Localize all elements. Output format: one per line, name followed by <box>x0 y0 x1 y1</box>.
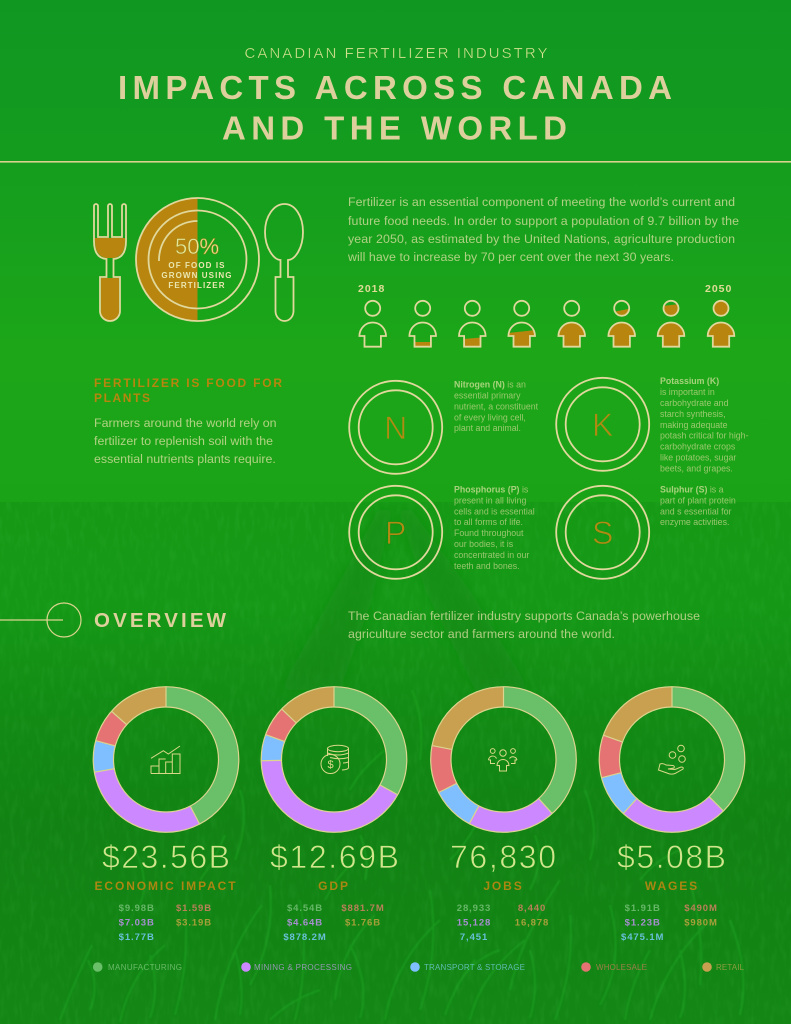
nutrient: nitrogen: nutrient, a constituent <box>454 401 539 411</box>
icon: people <box>488 749 517 771</box>
donut: gdp <box>261 686 407 832</box>
icon: plate with 50%: OF FOOD IS <box>168 261 226 270</box>
nutrient: potassium: starch synthesis, <box>660 409 726 419</box>
nutrient: sulphur: Sulphur (S) <box>660 484 707 494</box>
nutrient: sulphur: S <box>592 515 613 551</box>
person 1 <box>359 301 386 347</box>
nutrient: nitrogen: is an <box>505 380 526 390</box>
nutrient: sulphur: and s essential for <box>660 506 731 516</box>
left callout: fertilizer is food: essential nutrients plants require. <box>94 452 276 466</box>
intro text: year 2050, as estimated by the United Nations, agriculture production <box>348 232 735 246</box>
intro text <box>347 195 739 264</box>
overview text: The Canadian fertilizer industry supports Canada’s powerhouse <box>348 609 700 623</box>
nutrient: potassium: potash critical for high- <box>660 431 749 441</box>
person 2 <box>409 301 436 347</box>
left callout: fertilizer is food <box>94 376 282 466</box>
icon: plate with 50% <box>136 198 259 321</box>
stat: economic impact: $3.19B <box>176 918 212 928</box>
population timeline: 2018 <box>358 283 385 295</box>
icon: growth chart <box>151 746 180 774</box>
stat: gdp: $878.2M <box>283 932 327 943</box>
stat: wages: $5.08B <box>617 839 726 875</box>
left callout: fertilizer is food: FERTILIZER IS FOOD FOR <box>94 376 282 390</box>
stat: economic impact: $23.56B <box>102 839 230 875</box>
nutrient: phosphorus: Phosphorus (P) <box>454 484 520 494</box>
nutrient: potassium: making adequate <box>660 420 728 430</box>
nutrient: potassium: Potassium (K) <box>660 376 719 386</box>
legend: RETAIL <box>716 963 745 972</box>
person 5 <box>558 301 585 347</box>
nutrient: nitrogen <box>349 380 539 474</box>
stat: economic impact: $7.03B <box>119 918 155 928</box>
icon: hand with coins <box>658 745 685 774</box>
intro text: future food needs. In order to support a population of 9.7 billion by the <box>348 214 739 228</box>
stat: gdp: $881.7M <box>341 903 385 914</box>
icon: spoon <box>265 204 303 321</box>
nutrient: phosphorus: present in all living <box>454 495 526 505</box>
overview heading <box>0 603 227 637</box>
left callout: fertilizer is food: Farmers around the world rely on <box>94 416 277 430</box>
nutrient: phosphorus: cells and is essential <box>454 506 535 516</box>
legend: WHOLESALE <box>596 963 647 972</box>
stat: economic impact: ECONOMIC IMPACT <box>95 879 237 893</box>
icon: plate with 50%: FERTILIZER <box>168 281 226 290</box>
nutrient: nitrogen: essential primary <box>454 390 521 400</box>
nutrient: sulphur: enzyme activities. <box>660 517 729 527</box>
nutrient: nitrogen: N <box>384 410 407 446</box>
nutrient: nitrogen: plant and animal. <box>454 423 521 433</box>
intro text: will have to increase by 70 per cent over the next 30 years. <box>347 250 674 264</box>
main title <box>118 69 672 146</box>
nutrient: potassium: like potatoes, sugar <box>660 452 736 462</box>
population timeline: 2050 <box>705 283 732 295</box>
person 4 <box>508 301 536 347</box>
stat: jobs: JOBS <box>483 879 524 893</box>
stat: wages: $490M <box>684 903 718 914</box>
overview text: agriculture sector and farmers around the world. <box>348 627 615 641</box>
nutrient: potassium: is important in <box>660 387 715 397</box>
legend: TRANSPORT & STORAGE <box>424 963 525 972</box>
stat: wages: $980M <box>684 918 718 928</box>
nutrient: sulphur: part of plant protein <box>660 495 736 505</box>
stat: economic impact <box>95 839 237 943</box>
legend: MINING & PROCESSING <box>254 963 352 972</box>
stat: jobs: 15,128 <box>457 918 491 928</box>
stat: wages: $475.1M <box>621 932 664 943</box>
population timeline <box>358 283 734 347</box>
person 6 <box>608 301 635 347</box>
intro text: Fertilizer is an essential component of meeting the world’s current and <box>348 195 735 209</box>
overview heading: OVERVIEW <box>94 609 227 632</box>
stat: wages: $1.23B <box>625 918 661 928</box>
main title: AND THE WORLD <box>222 110 567 146</box>
person 8 <box>708 301 734 347</box>
nutrient: potassium: K <box>592 407 613 443</box>
stat: jobs: 7,451 <box>460 932 488 943</box>
stat: wages: WAGES <box>645 879 699 893</box>
left callout: fertilizer is food: fertilizer to replenish soil with the <box>94 434 273 448</box>
legend <box>93 962 745 972</box>
stat: gdp: $4.64B <box>287 918 323 928</box>
icon: coins: $ <box>327 759 334 771</box>
stat: jobs: 8,440 <box>518 903 546 914</box>
icon: plate with 50%: 50% <box>175 234 219 259</box>
left callout: fertilizer is food: PLANTS <box>94 391 152 405</box>
stat: gdp: $1.76B <box>345 918 381 928</box>
stat: gdp: $4.54B <box>287 903 323 914</box>
donut: wages <box>599 686 745 832</box>
stat: jobs: 16,878 <box>515 918 549 928</box>
stat: economic impact: $9.98B <box>119 903 155 914</box>
stat: wages <box>617 839 726 943</box>
icon: fork <box>94 204 126 321</box>
nutrient: sulphur <box>556 484 736 579</box>
donut: economic impact <box>93 686 239 832</box>
legend: MANUFACTURING <box>108 963 182 972</box>
eyebrow title: CANADIAN FERTILIZER INDUSTRY <box>244 45 548 62</box>
stat: gdp <box>270 839 399 943</box>
stat: economic impact: $1.59B <box>176 903 212 914</box>
nutrient: nitrogen: Nitrogen (N) <box>454 380 505 390</box>
stat: economic impact: $1.77B <box>119 932 155 943</box>
main title: IMPACTS ACROSS CANADA <box>118 69 672 106</box>
overview text <box>348 609 700 641</box>
nutrient: phosphorus: P <box>385 515 406 551</box>
stat: jobs <box>450 839 556 943</box>
donut: jobs <box>431 686 576 832</box>
nutrient: phosphorus: is <box>520 484 529 494</box>
person 7 <box>658 301 684 347</box>
icon: coins <box>321 745 348 774</box>
nutrient: phosphorus: teeth and bones. <box>454 561 520 571</box>
nutrient: potassium: carbohydrate crops <box>660 442 736 452</box>
stat: gdp: GDP <box>318 879 350 893</box>
nutrient: phosphorus: concentrated in our <box>454 550 529 560</box>
nutrient: potassium: carbohydrate and <box>660 398 729 408</box>
nutrient: phosphorus <box>349 484 535 579</box>
stat: jobs: 76,830 <box>450 839 556 875</box>
nutrient: phosphorus: our bodies, it is <box>454 539 514 549</box>
nutrient: potassium <box>556 376 749 473</box>
nutrient: phosphorus: to all forms of life. <box>454 517 523 527</box>
person 3 <box>459 301 486 347</box>
nutrient: potassium: beets, and grapes. <box>660 463 733 473</box>
icon: plate with 50%: GROWN USING <box>161 271 233 280</box>
stat: jobs: 28,933 <box>457 903 491 914</box>
stat: gdp: $12.69B <box>270 839 399 875</box>
nutrient: phosphorus: Found throughout <box>454 528 524 538</box>
stat: wages: $1.91B <box>625 903 661 914</box>
nutrient: nitrogen: of every living cell, <box>454 412 526 422</box>
nutrient: sulphur: is a <box>707 484 724 494</box>
